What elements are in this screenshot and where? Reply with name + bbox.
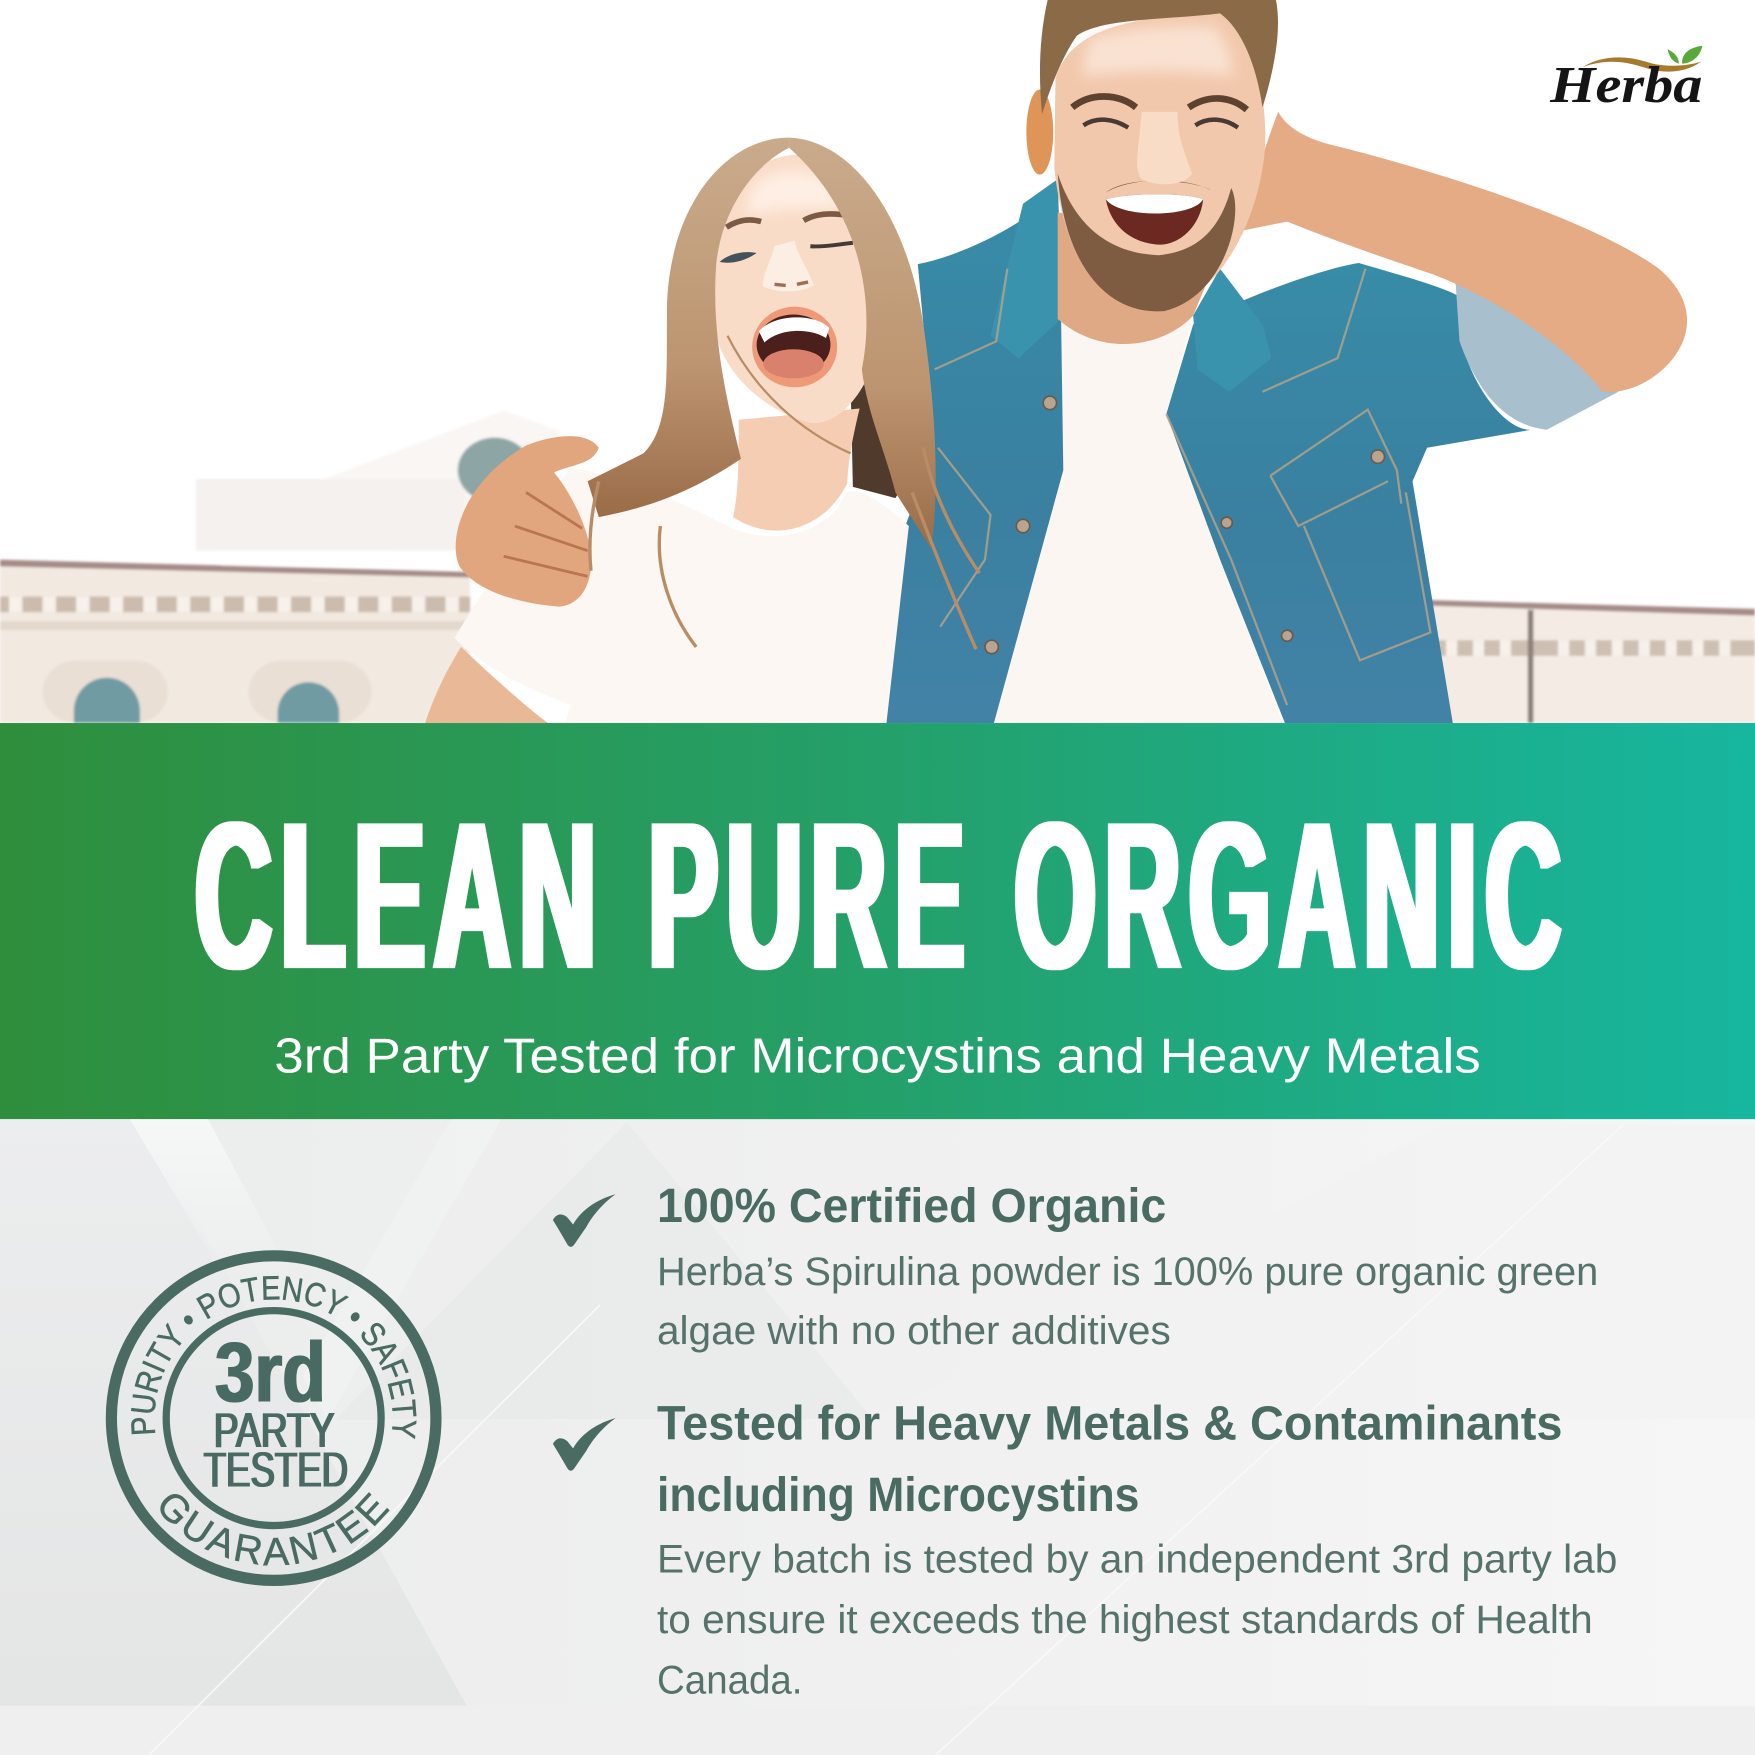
badge bottom arc text: GUARANTEE — [160, 1492, 390, 1566]
text block: certified organic — [657, 1249, 1598, 1353]
jacket details: pocket, stitching and buttons — [935, 269, 1430, 705]
badge inner ring — [166, 1311, 381, 1526]
woman's arm — [425, 647, 548, 723]
man's facial features — [1058, 97, 1247, 311]
loose strands of hair — [590, 336, 979, 649]
man's arm behind head — [1231, 112, 1687, 392]
building on the right — [1421, 600, 1755, 723]
woman's hair, right side — [789, 138, 936, 548]
man's neck — [1058, 213, 1231, 344]
man's face — [1054, 13, 1265, 309]
logo wordmark: Herba — [1549, 57, 1702, 114]
photo: smiling couple outdoors — [0, 0, 1755, 723]
badge number: 3rd — [215, 1325, 326, 1420]
jacket right panel and sleeve — [1166, 263, 1531, 723]
badge outer ring — [111, 1256, 436, 1580]
man's ear — [1026, 90, 1053, 175]
heading: tested for heavy metals — [657, 1396, 1562, 1522]
text block: tested for heavy metals — [657, 1537, 1617, 1702]
logo leaves — [1668, 46, 1702, 64]
logo swoosh — [1583, 57, 1701, 72]
jacket collar — [991, 179, 1271, 392]
text block: tested for heavy metals: Canada. — [657, 1657, 803, 1702]
text block: certified organic: algae with no other additives — [657, 1308, 1171, 1353]
text block: tested for heavy metals: to ensure it exceeds the highest standards of Health — [657, 1597, 1593, 1642]
badge: 3rd party tested guarantee — [106, 1250, 442, 1586]
man's t-shirt — [994, 316, 1283, 723]
badge word TESTED: TESTED — [204, 1442, 348, 1497]
woman's hair, left side — [588, 138, 789, 517]
title: CLEAN — [195, 778, 604, 1013]
heading: certified organic: 100% Certified Organic — [657, 1179, 1166, 1233]
man's forehead highlight — [1083, 26, 1232, 76]
dark hair behind woman's neck — [851, 381, 912, 498]
hand finger lines — [504, 492, 588, 576]
badge word PARTY: PARTY — [214, 1403, 335, 1458]
text block: certified organic: Herba’s Spirulina powder is 100% pure organic green — [657, 1249, 1598, 1294]
building on the left — [0, 411, 560, 723]
text block: tested for heavy metals: Every batch is tested by an independent 3rd party lab — [657, 1537, 1617, 1582]
jacket left panel — [884, 201, 1066, 723]
logo: Herba — [1549, 46, 1702, 114]
woman's forehead highlight — [748, 171, 840, 215]
man's hand on woman's shoulder — [456, 436, 599, 607]
heading: tested for heavy metals: Tested for Heavy Metals & Contaminants — [657, 1396, 1562, 1450]
man's hair — [1040, 0, 1278, 114]
sleeve cuff — [1455, 274, 1618, 430]
woman's facial features — [720, 214, 853, 387]
icon: first check mark — [553, 1194, 616, 1247]
woman's face — [714, 154, 880, 423]
woman's neck — [733, 409, 860, 531]
woman's t-shirt — [454, 468, 909, 723]
heading: tested for heavy metals: including Microcystins — [657, 1468, 1139, 1522]
subtitle: 3rd Party Tested for Microcystins and Heavy Metals — [274, 1028, 1481, 1083]
icon: second check mark — [553, 1418, 616, 1471]
badge top arc text: PURITY • POTENCY • SAFETY — [131, 1276, 416, 1440]
title: PURE — [648, 778, 973, 1013]
title — [195, 778, 1569, 1013]
panel: lower background — [0, 1119, 1755, 1755]
banner: green gradient — [0, 723, 1755, 1119]
